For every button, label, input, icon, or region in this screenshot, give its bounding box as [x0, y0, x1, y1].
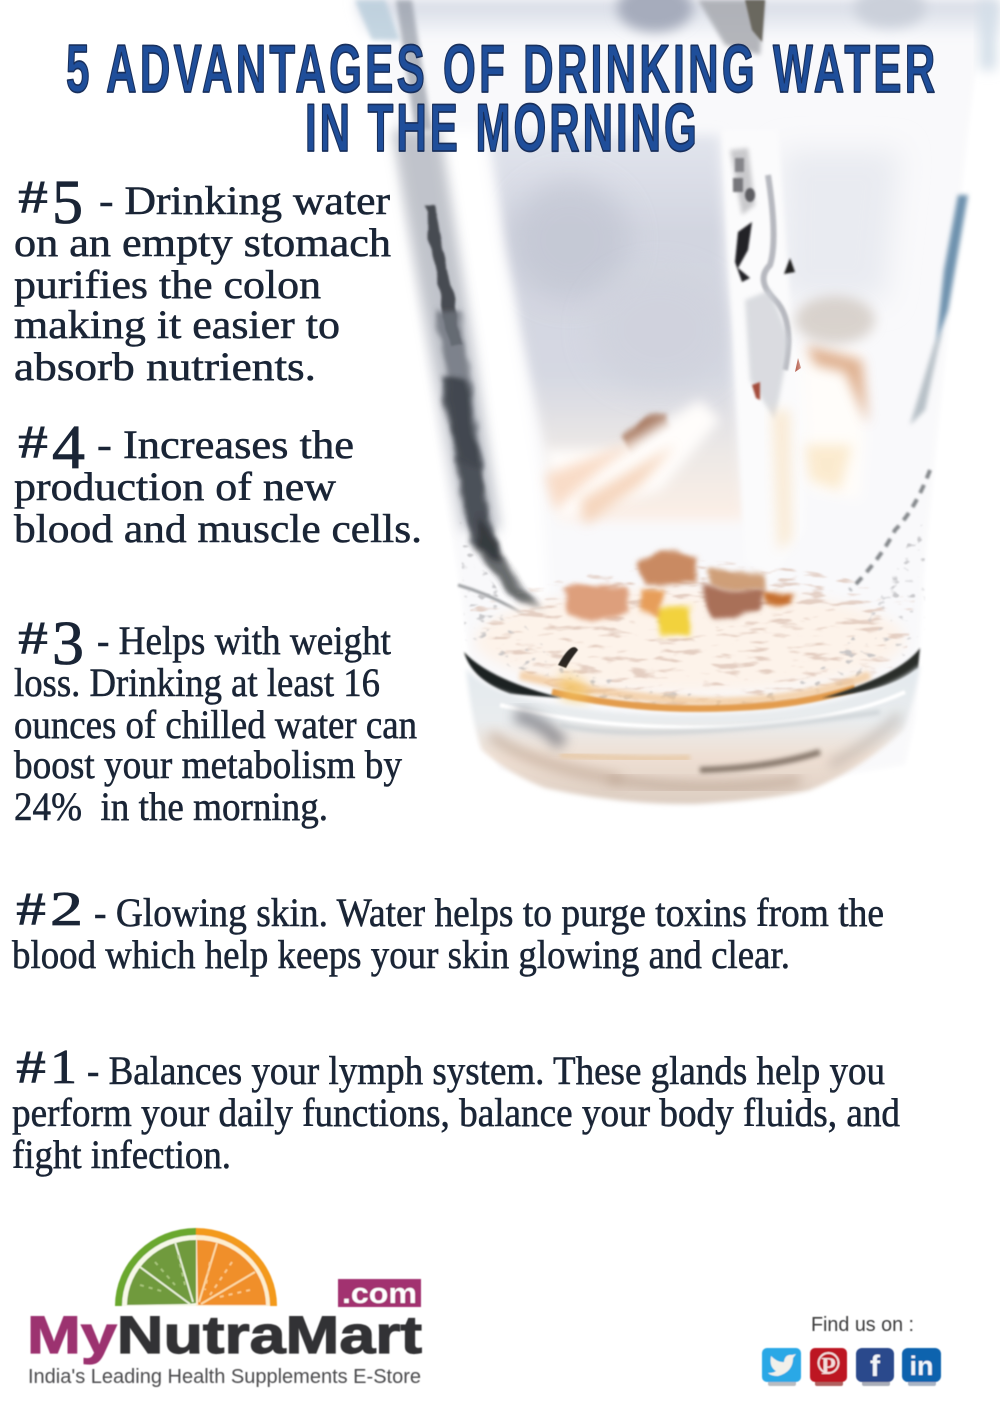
benefit #1: #: [16, 1041, 46, 1094]
title: [66, 31, 935, 165]
benefit #1: fight infection.: [12, 1132, 231, 1177]
benefit #4: - Increases the: [97, 422, 354, 467]
icon: pinterest: P: [821, 1354, 836, 1380]
left glass wall streaks: [355, 0, 597, 664]
logo: MyNutraMart: [27, 1228, 422, 1388]
benefit #3: boost your metabolism by: [14, 742, 402, 787]
icon: pinterest: [810, 1348, 847, 1386]
.com badge: .com: [342, 1278, 417, 1310]
benefit #4: [14, 414, 422, 551]
benefit #5: absorb nutrients.: [14, 344, 316, 389]
benefit #5: on an empty stomach: [14, 220, 391, 265]
brand name: My NutraMart: [27, 1306, 422, 1365]
benefit #5: - Drinking water: [99, 178, 390, 223]
benefit #4: 4: [52, 414, 85, 482]
icon: linkedin: in: [910, 1351, 934, 1381]
icon: twitter: [762, 1348, 801, 1386]
benefit #3: [14, 610, 417, 829]
benefit #4: blood and muscle cells.: [14, 506, 422, 551]
icon: citrus half slice: [115, 1228, 277, 1306]
benefit #3: loss. Drinking at least 16: [14, 660, 380, 705]
benefit #2: 2: [50, 881, 83, 936]
benefit #2: [12, 881, 884, 977]
icon: facebook: f: [870, 1350, 881, 1383]
benefit #1: [12, 1039, 900, 1177]
dark rim of glass base: [464, 648, 920, 698]
benefit #3: 3: [52, 610, 84, 678]
benefit #3: 24% in the morning.: [14, 784, 328, 829]
icon: linkedin: [902, 1348, 941, 1386]
benefit #1: - Balances your lymph system. These glands help you: [87, 1048, 885, 1093]
water stream: [698, 0, 808, 580]
benefit #2: blood which help keeps your skin glowing and clear.: [12, 932, 790, 977]
benefit #5: [14, 169, 391, 389]
benefit #4: #: [18, 416, 48, 469]
title: 5 ADVANTAGES OF DRINKING WATER: [66, 31, 935, 106]
benefit #4: production of new: [14, 464, 336, 509]
benefit #5: making it easier to: [14, 302, 340, 347]
icon: facebook: [856, 1348, 894, 1386]
right glass wall streak: [850, 195, 968, 590]
glass base: [466, 665, 920, 804]
image: water pouring into glass: [355, 0, 1000, 804]
tagline: India's Leading Health Supplements E-Store: [28, 1366, 421, 1388]
swirl mottling: [460, 500, 925, 712]
benefit #5: 5: [52, 169, 83, 237]
orange reflections: [460, 296, 925, 712]
title: IN THE MORNING: [305, 90, 697, 165]
benefit #2: #: [16, 883, 46, 936]
benefit #1: perform your daily functions, balance your body fluids, and: [12, 1090, 900, 1135]
benefit #3: - Helps with weight: [97, 618, 391, 663]
find us on label: Find us on :: [811, 1314, 914, 1336]
benefit #5: purifies the colon: [14, 262, 321, 307]
benefit #3: #: [18, 612, 48, 665]
benefit #3: ounces of chilled water can: [14, 702, 417, 747]
benefit #5: #: [18, 171, 48, 224]
benefit #1: 1: [50, 1039, 77, 1094]
benefit #2: - Glowing skin. Water helps to purge toxins from the: [94, 890, 884, 935]
social links: [762, 1314, 941, 1386]
